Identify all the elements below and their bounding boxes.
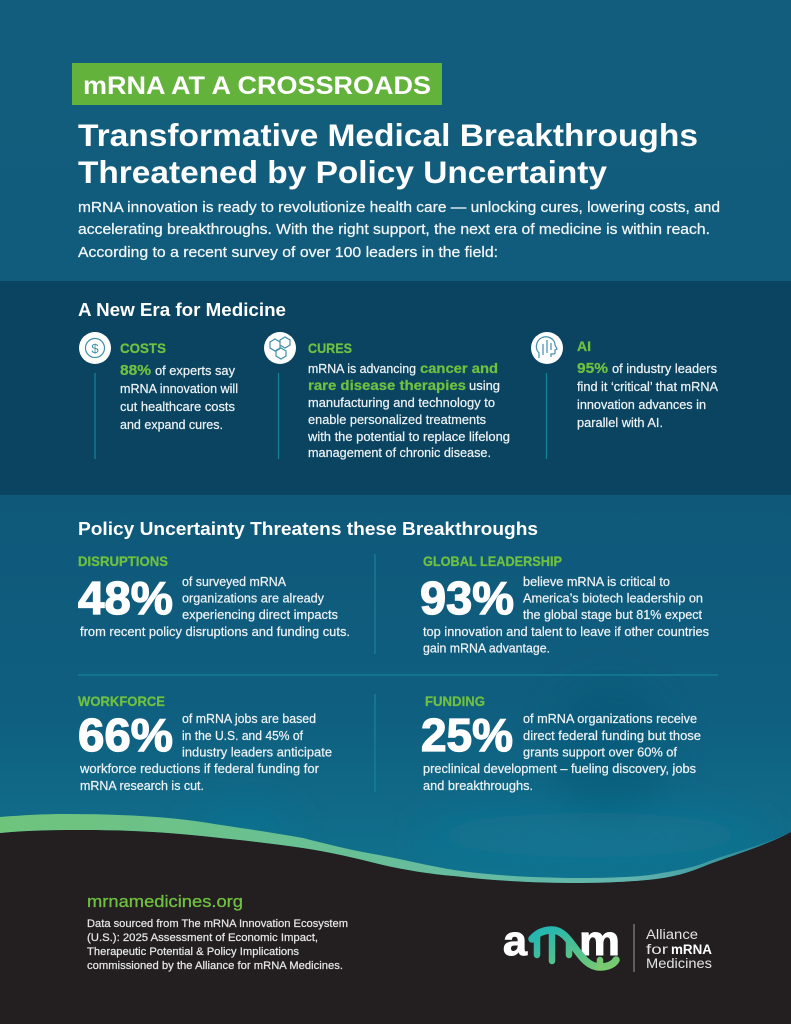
- background: policy section: [0, 495, 791, 895]
- icon: dollar coin: [79, 332, 111, 364]
- costs text: [120, 362, 238, 432]
- costs text: cut healthcare costs: [120, 399, 235, 414]
- disruptions text: experiencing direct impacts: [182, 607, 338, 622]
- heading: A New Era for Medicine: A New Era for Medicine: [78, 300, 286, 320]
- global leadership text: gain mRNA advantage.: [423, 640, 550, 656]
- panel: costs: [79, 332, 238, 459]
- costs heading: COSTS: [120, 340, 166, 356]
- stat: 66%: 66%: [78, 709, 173, 761]
- global leadership text: America’s biotech leadership on: [523, 590, 703, 606]
- cures text: using: [469, 378, 500, 393]
- background: molecule texture: [195, 680, 760, 857]
- cures text: enable personalized treatments: [308, 412, 486, 427]
- cures text: manufacturing and technology to: [308, 395, 495, 410]
- cures heading: CURES: [308, 340, 352, 356]
- icon: hexagon molecules: [264, 332, 296, 364]
- cures text: management of chronic disease.: [308, 445, 491, 460]
- logo wordmark: Alliance: [646, 927, 698, 942]
- footer source note: Data sourced from The mRNA Innovation Ecosystem: [87, 918, 348, 930]
- cures text: rare disease therapies: [308, 377, 466, 393]
- workforce text: in the U.S. and 45% of: [182, 728, 303, 743]
- background: dark band: [0, 281, 791, 495]
- AI text: find it ‘critical’ that mRNA: [577, 379, 718, 394]
- footer source note: [87, 918, 348, 972]
- logo: Alliance for mRNA Medicines: [503, 917, 712, 972]
- cures text: cancer and: [420, 360, 498, 376]
- global leadership text: [423, 574, 709, 656]
- intro paragraph: mRNA innovation is ready to revolutionize health care — unlocking cures, lowering costs, and: [78, 199, 720, 216]
- global leadership text: the global stage but 81% expect: [523, 607, 702, 622]
- heading: Policy Uncertainty: Policy Uncertainty Threatens these Breakthroughs: [78, 519, 538, 539]
- stat: 93%: 93%: [420, 572, 514, 624]
- footer wave and black base: [0, 814, 791, 1024]
- logo wordmark: Medicines: [646, 956, 712, 971]
- logo mark: m: [579, 917, 620, 964]
- logo mark: a: [503, 917, 528, 964]
- title: Threatened by Policy Uncertainty: [78, 154, 607, 190]
- disruptions text: from recent policy disruptions and funding cuts.: [80, 624, 350, 639]
- icon: dollar coin: $: [91, 341, 99, 356]
- footer source note: Therapeutic Potential & Policy Implications: [87, 946, 300, 958]
- cures text: mRNA is advancing: [308, 361, 416, 376]
- panel: workforce: [78, 693, 332, 793]
- funding text: preclinical development – fueling discovery, jobs: [423, 761, 696, 776]
- AI text: parallel with AI.: [577, 415, 663, 430]
- stat: 25%: 25%: [421, 709, 513, 761]
- logo wordmark: for: [646, 942, 669, 957]
- funding text: [423, 711, 701, 793]
- panel: global leadership: [420, 553, 709, 656]
- funding text: and breakthroughs.: [423, 778, 533, 793]
- cures text: with the potential to replace lifelong: [307, 429, 510, 444]
- badge: mRNA at a crossroads: mRNA AT A CROSSROADS: [83, 72, 431, 100]
- green wave ribbon: [0, 814, 791, 883]
- icon: AI head: [531, 332, 563, 364]
- disruptions text: organizations are already: [182, 590, 324, 606]
- workforce text: [79, 711, 332, 793]
- title: [78, 117, 698, 190]
- AI text: [577, 360, 718, 430]
- workforce text: industry leaders anticipate: [182, 744, 332, 760]
- global leadership text: top innovation and talent to leave if other countries: [423, 624, 709, 639]
- intro paragraph: accelerating breakthroughs. With the right support, the next era of medicine is within reach.: [78, 221, 710, 238]
- disruptions text: of surveyed mRNA: [182, 574, 286, 589]
- workforce heading: WORKFORCE: [78, 693, 165, 709]
- background: header: [0, 0, 791, 281]
- stat: 48%: 48%: [78, 572, 173, 624]
- logo wordmark: mRNA: [671, 942, 712, 957]
- costs text: 88%: [120, 362, 151, 379]
- cures text: [307, 360, 510, 460]
- costs text: mRNA innovation will: [120, 381, 238, 396]
- costs text: and expand cures.: [120, 417, 223, 432]
- footer url: mrnamedicines.org: [87, 892, 243, 911]
- badge: mRNA at a crossroads: [72, 63, 442, 105]
- global leadership heading: GLOBAL LEADERSHIP: [423, 553, 562, 569]
- AI text: 95%: [577, 360, 608, 377]
- disruptions heading: DISRUPTIONS: [78, 553, 168, 569]
- intro paragraph: [78, 199, 720, 261]
- footer source note: (U.S.): 2025 Assessment of Economic Impact,: [87, 932, 318, 944]
- AI heading: AI: [577, 338, 591, 354]
- costs text: of experts say: [155, 363, 235, 378]
- title: Transformative Medical Breakthroughs: [78, 117, 698, 153]
- funding text: of mRNA organizations receive: [523, 711, 697, 726]
- workforce text: workforce reductions if federal funding for: [79, 761, 320, 776]
- workforce text: mRNA research is cut.: [80, 778, 204, 793]
- funding text: direct federal funding but those: [523, 728, 701, 743]
- intro paragraph: According to a recent survey of over 100 leaders in the field:: [78, 244, 498, 261]
- workforce text: of mRNA jobs are based: [182, 711, 316, 726]
- funding heading: FUNDING: [425, 693, 485, 709]
- footer source note: commissioned by the Alliance for mRNA Medicines.: [87, 960, 343, 972]
- disruptions text: [80, 574, 350, 639]
- logo wordmark: [646, 927, 712, 971]
- panel: disruptions: [78, 553, 350, 639]
- panel: funding: [421, 693, 701, 793]
- footer base: [0, 830, 791, 1024]
- AI text: of industry leaders: [612, 361, 717, 376]
- panel: AI: [531, 332, 718, 459]
- panel: cures: [264, 332, 510, 460]
- funding text: grants support over 60% of: [523, 744, 677, 760]
- global leadership text: believe mRNA is critical to: [523, 574, 670, 589]
- AI text: innovation advances in: [577, 397, 706, 412]
- logo mark: [503, 917, 620, 967]
